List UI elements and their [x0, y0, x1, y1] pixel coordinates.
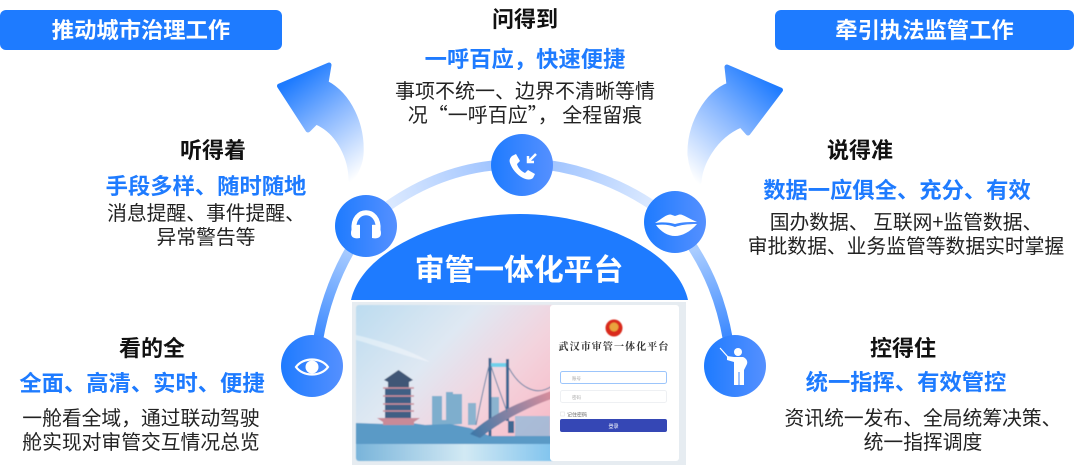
panel: top center	[395, 7, 655, 128]
username field	[560, 372, 666, 384]
heading: 看的全	[119, 336, 185, 361]
emblem	[606, 320, 622, 336]
description: 况“一呼百应”， 全程留痕	[408, 99, 642, 128]
password field	[560, 390, 666, 402]
description: 消息提醒、事件提醒、	[107, 197, 305, 226]
description	[748, 206, 1064, 258]
subheading: 数据一应俱全、充分、有效	[763, 178, 1031, 203]
description	[107, 197, 305, 250]
icon: phone	[491, 134, 553, 196]
subheading: 手段多样、随时随地	[106, 174, 306, 199]
heading: 问得到	[492, 7, 558, 32]
login button: 登录	[608, 423, 619, 430]
icon: headphones	[335, 195, 397, 257]
icon: eye	[281, 335, 343, 397]
banner: left	[0, 10, 282, 50]
panel: left lower	[19, 336, 265, 455]
heading: 控得住	[870, 336, 936, 361]
panel: right lower	[785, 336, 1061, 455]
login button	[560, 419, 667, 432]
icon: lips	[644, 191, 706, 253]
subheading: 统一指挥、有效管控	[806, 370, 1006, 395]
subheading: 全面、高清、实时、便捷	[19, 371, 265, 396]
description: 资讯统一发布、全局统筹决策、	[785, 402, 1061, 431]
description: 事项不统一、边界不清晰等情	[395, 75, 655, 104]
panel: left upper	[106, 138, 306, 250]
login panel	[550, 305, 679, 461]
description: 异常警告等	[157, 220, 255, 250]
description	[785, 402, 1061, 455]
banner: right	[775, 10, 1074, 50]
icon: presenter	[704, 335, 766, 397]
arc: lips to presenter	[690, 243, 728, 340]
description	[22, 402, 260, 455]
banner: left: 推动城市治理工作	[52, 18, 230, 43]
dome: platform header	[351, 214, 688, 300]
login screenshot	[352, 302, 686, 465]
dome title: 审管一体化平台	[415, 253, 623, 287]
description	[395, 75, 655, 128]
description: 国办数据、 互联网+监管数据、	[770, 206, 1042, 235]
arrow: upper left	[280, 65, 361, 180]
description: 统一指挥调度	[864, 426, 982, 455]
username field: 账号	[572, 375, 581, 382]
arc: headphones to phone	[388, 165, 498, 206]
description: 舱实现对审管交互情况总览	[22, 426, 260, 455]
arrow: upper right	[690, 67, 780, 182]
banner: right: 牵引执法监管工作	[835, 18, 1014, 43]
remember checkbox: 记住密码	[567, 412, 587, 418]
remember checkbox	[560, 412, 587, 418]
arc: phone to lips	[548, 165, 652, 205]
description: 一舱看全域，通过联动驾驶	[22, 402, 260, 431]
heading: 听得着	[180, 138, 246, 163]
subheading: 一呼百应，快速便捷	[425, 47, 625, 72]
description: 审批数据、业务监管等数据实时掌握	[748, 230, 1064, 258]
login title: 武汉市审管一体化平台	[558, 338, 670, 353]
password field: 密码	[572, 394, 581, 401]
panel: right upper	[748, 138, 1064, 258]
heading: 说得准	[827, 138, 893, 163]
arc: eye to headphones	[318, 240, 356, 340]
city photo	[356, 305, 554, 461]
